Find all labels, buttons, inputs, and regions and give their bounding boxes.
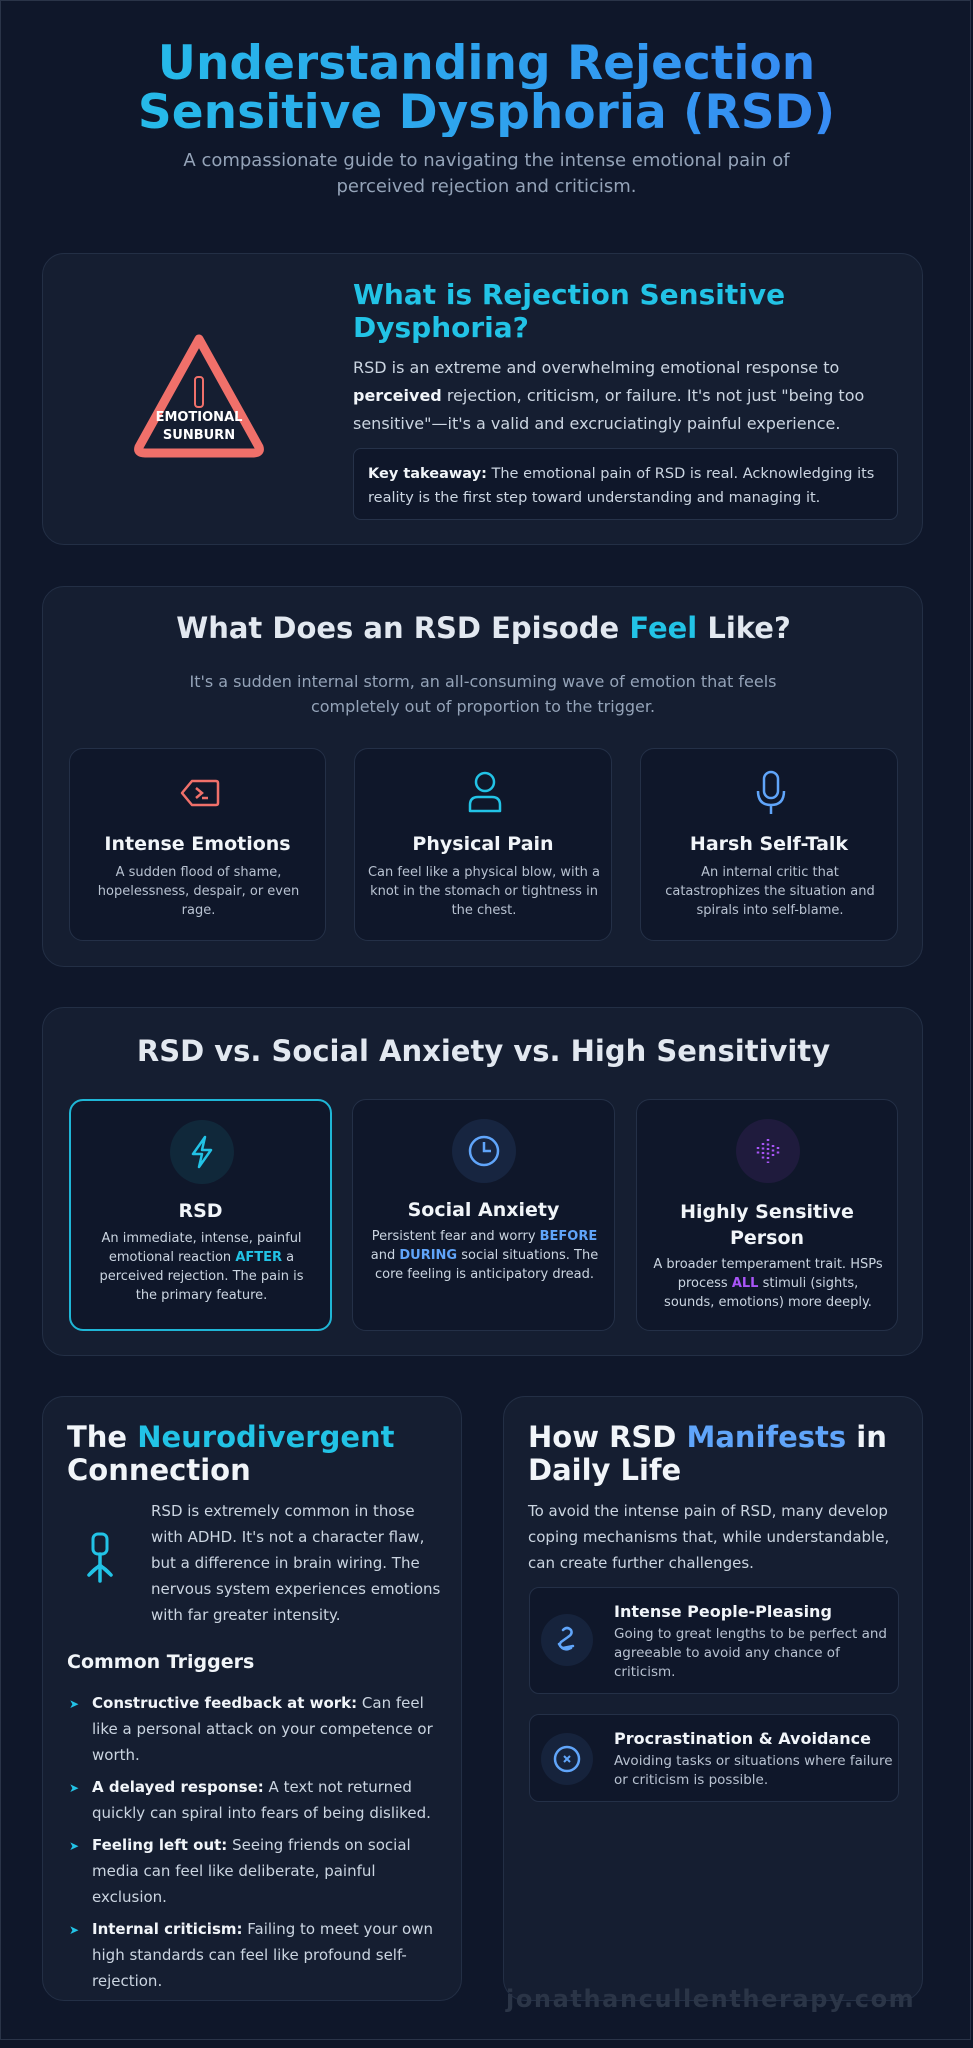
card: intense emotions: Intense Emotions: [104, 833, 291, 855]
text block: It's a sudden internal storm, an all-consuming wave of emotion that feels completely out of proportion to the trigger.: [189, 672, 777, 716]
heading: What Does an RSD Episode Feel Like?: [176, 611, 791, 645]
card: social anxiety: Social Anxiety: [408, 1199, 559, 1221]
list: triggers: ➤: [69, 1781, 79, 1795]
list: triggers: ➤: [69, 1839, 79, 1853]
panel: what is RSD: [42, 253, 923, 545]
heading: Connection: [67, 1453, 251, 1487]
panel: comparison: [42, 1007, 923, 1356]
card: HSP: [636, 1099, 898, 1331]
card: physical pain: [354, 748, 612, 941]
card: harsh self-talk: [640, 748, 898, 941]
title: Sensitive Dysphoria (RSD): [138, 85, 835, 140]
list: triggers: Internal criticism: Failing to meet your own high standards can feel like profound self-rejection.: [92, 1920, 433, 1990]
icon: neuron: [87, 1532, 113, 1583]
card: HSP: A broader temperament trait. HSPs process ALL stimuli (sights, sounds, emotions) more deeply.: [653, 1257, 883, 1310]
text block: RSD is an extreme and overwhelming emotional response to perceived rejection, criticism, or failure. It's not just "being too sensitive"—it's a valid and excruciatingly painful experience.: [353, 358, 864, 433]
list: triggers: A delayed response: A text not returned quickly can spiral into fears of being disliked.: [92, 1778, 431, 1822]
icon: x circle: [541, 1733, 593, 1785]
heading: What is Rejection Sensitive Dysphoria?: [353, 278, 785, 344]
text block: RSD is extremely common in those with ADHD. It's not a character flaw, but a difference in brain wiring. The nervous system experiences emotions with far greater intensity.: [151, 1502, 440, 1624]
icon: lightning: [170, 1120, 234, 1184]
watermark: jonathancullentherapy.com: [506, 1985, 915, 2013]
callout: key takeaway: [353, 448, 898, 520]
heading: RSD vs. Social Anxiety vs. High Sensitivity: [137, 1034, 830, 1068]
subtitle: A compassionate guide to navigating the intense emotional pain of perceived rejection and criticism.: [183, 150, 790, 197]
panel: episode feel: [42, 586, 923, 967]
panel: neurodivergent connection: [42, 1396, 462, 2001]
callout: key takeaway: Key takeaway: The emotional pain of RSD is real. Acknowledging its reality is the first step toward understanding and managing it.: [368, 466, 874, 506]
icon: warning triangle emotional sunburn: [134, 334, 264, 458]
panel: daily life: [503, 1396, 923, 2001]
card: physical pain: Can feel like a physical blow, with a knot in the stomach or tightness in the chest.: [368, 865, 600, 918]
card: harsh self-talk: Harsh Self-Talk: [690, 833, 848, 855]
card: procrastination: [529, 1714, 899, 1802]
card: RSD: [69, 1099, 332, 1331]
card: intense emotions: [69, 748, 326, 941]
list: triggers: ➤: [69, 1923, 79, 1937]
heading: How RSD Manifests in: [528, 1420, 887, 1454]
list: triggers: [69, 1694, 433, 1990]
card: intense emotions: A sudden flood of shame, hopelessness, despair, or even rage.: [98, 865, 299, 918]
heading: common triggers: Common Triggers: [67, 1651, 254, 1673]
list: triggers: ➤: [69, 1697, 79, 1711]
card: harsh self-talk: An internal critic that catastrophizes the situation and spirals into self-blame.: [665, 865, 875, 918]
card: people-pleasing: Going to great lengths to be perfect and agreeable to avoid any chance of criticism.: [614, 1626, 887, 1680]
card: procrastination: Procrastination & Avoidance: [614, 1729, 871, 1748]
card: RSD: RSD: [178, 1200, 223, 1222]
card: social anxiety: Persistent fear and worry BEFORE and DURING social situations. The core feeling is anticipatory dread.: [371, 1229, 598, 1282]
card: people-pleasing: Intense People-Pleasing: [614, 1602, 832, 1621]
list: triggers: Constructive feedback at work: Can feel like a personal attack on your competence or worth.: [92, 1694, 433, 1764]
heading: [528, 1420, 887, 1487]
icon: microphone: [756, 770, 786, 814]
card: people-pleasing: [529, 1587, 899, 1694]
icon: tag: [180, 780, 220, 806]
heading: The Neurodivergent: [67, 1420, 395, 1454]
card: HSP: Person: [730, 1227, 804, 1249]
title: Understanding Rejection: [158, 36, 815, 91]
title: [0, 39, 973, 137]
icon: hands: [541, 1614, 593, 1666]
card: social anxiety: [352, 1099, 615, 1331]
icon: warning triangle emotional sunburn: EMOTIONAL: [156, 410, 242, 425]
card: procrastination: Avoiding tasks or situations where failure or criticism is possible.: [614, 1753, 893, 1788]
heading: [67, 1420, 395, 1487]
text block: To avoid the intense pain of RSD, many develop coping mechanisms that, while understandable, can create further challenges.: [528, 1502, 889, 1572]
card: HSP: Highly Sensitive: [680, 1201, 854, 1223]
icon: clock: [452, 1119, 516, 1183]
icon: sound wave: [736, 1119, 800, 1183]
list: triggers: Feeling left out: Seeing friends on social media can feel like deliberate, painful exclusion.: [92, 1836, 411, 1906]
card: physical pain: Physical Pain: [412, 833, 554, 855]
heading: Daily Life: [528, 1453, 681, 1487]
icon: person: [468, 772, 502, 812]
icon: warning triangle emotional sunburn: SUNBURN: [163, 428, 235, 443]
card: RSD: An immediate, intense, painful emotional reaction AFTER a perceived rejection. The pain is the primary feature.: [99, 1231, 304, 1303]
